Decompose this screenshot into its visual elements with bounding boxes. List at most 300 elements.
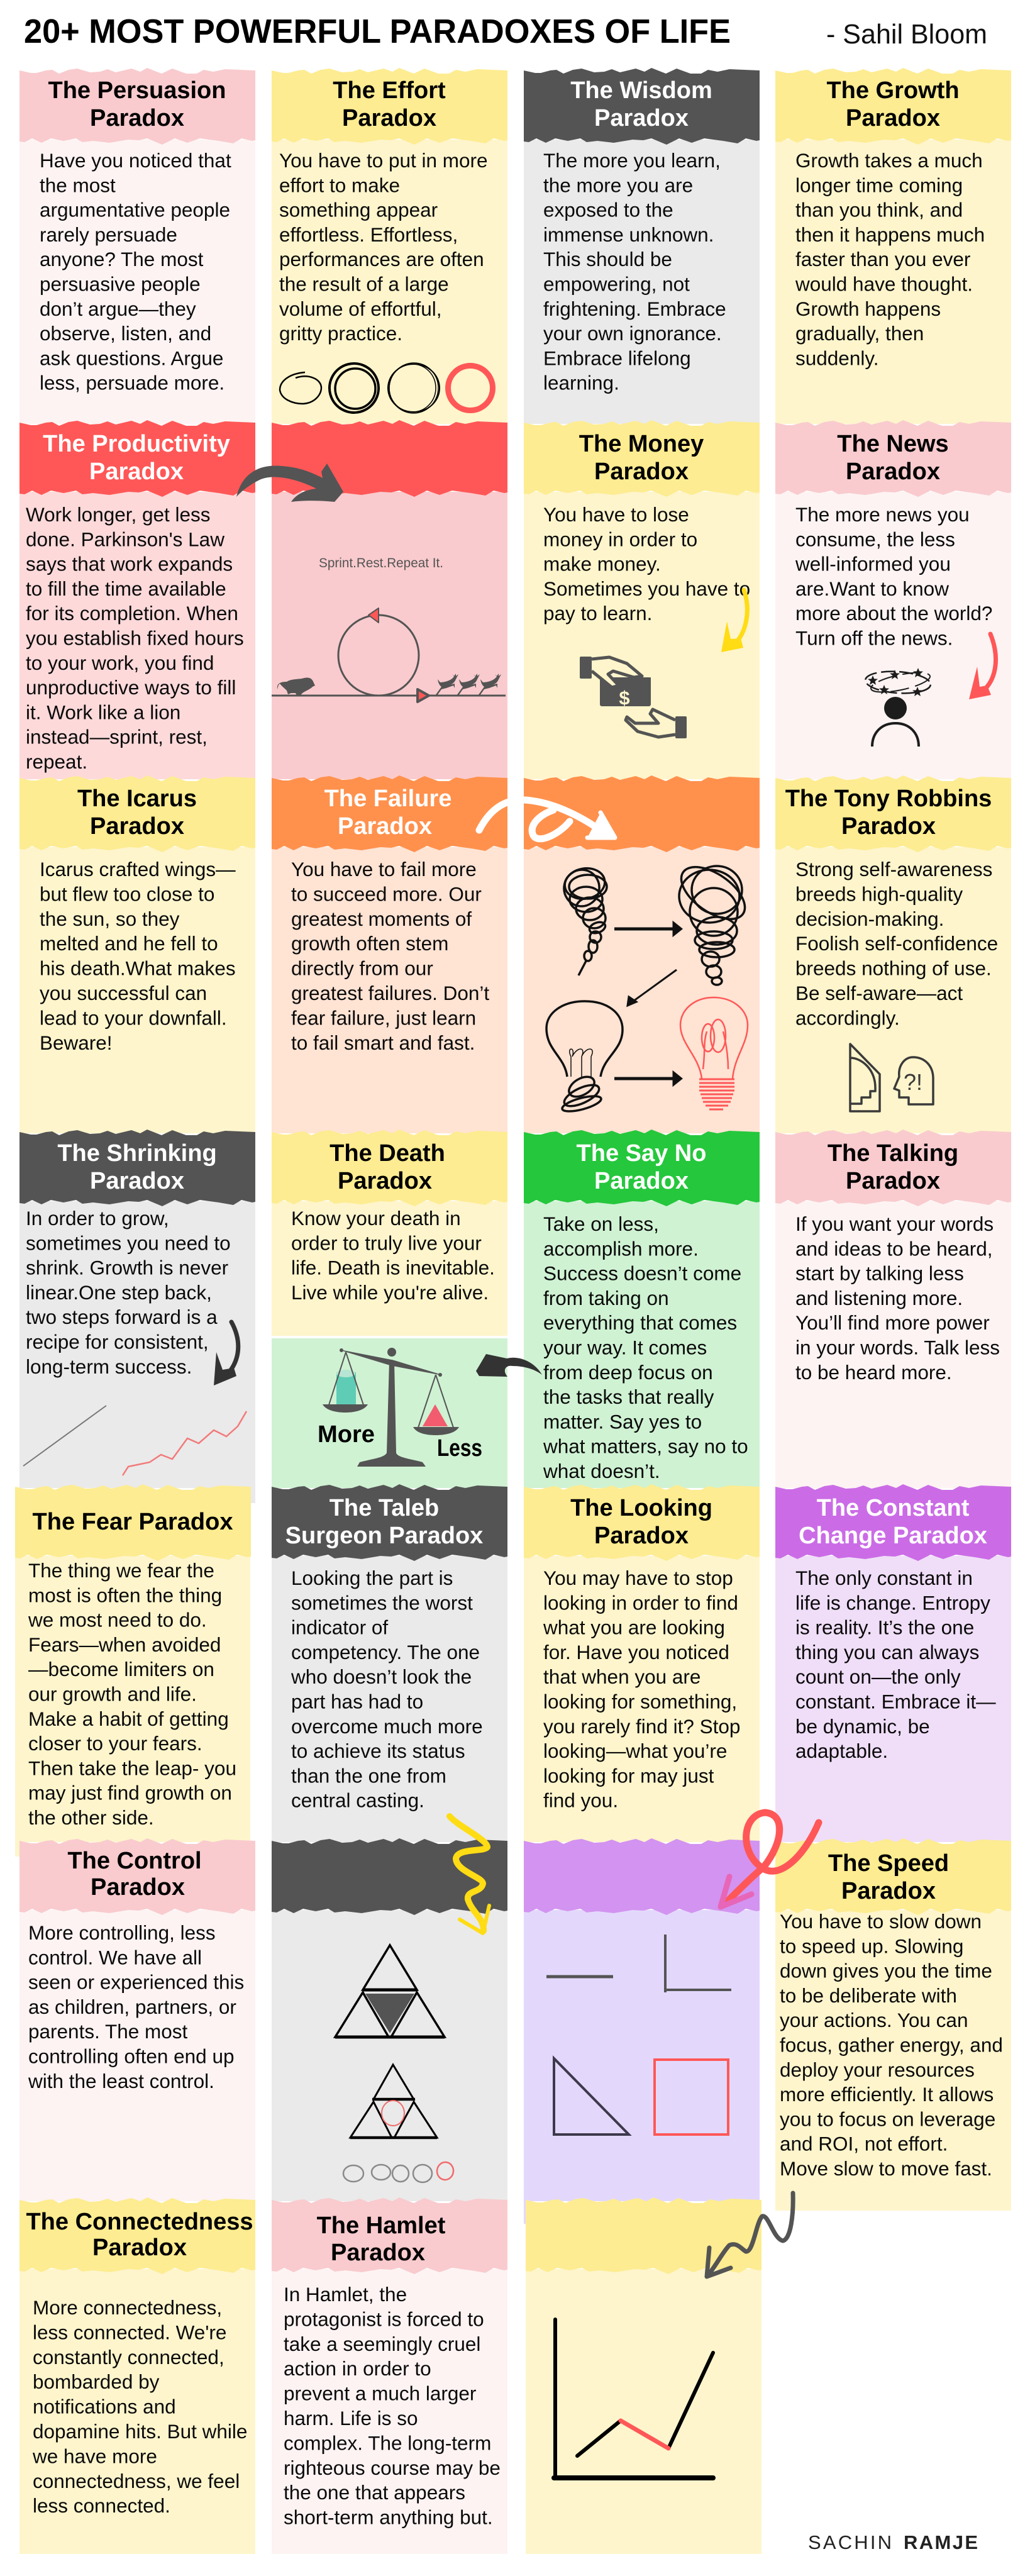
panel: icarus paradox: Paradox <box>90 813 184 840</box>
panel: speed paradox: The Speed <box>828 1850 949 1877</box>
panel: hamlet paradox: complex. The long-term <box>284 2431 491 2454</box>
panel: hamlet paradox: harm. Life is so <box>284 2407 418 2429</box>
panel: productivity paradox: to fill the time available <box>26 577 226 600</box>
arrow: dark squiggle to chart <box>707 2193 793 2277</box>
panel: shrinking paradox: shrink. Growth is never <box>26 1257 228 1279</box>
panel: connectedness paradox: The Connectedness <box>26 2209 253 2235</box>
panel: looking paradox: looking—what you’re <box>543 1740 727 1762</box>
label: less: Less <box>437 1435 482 1462</box>
panel: fear paradox: —become limiters on <box>28 1658 214 1680</box>
panel: productivity paradox: for its completion. When <box>26 602 238 625</box>
panel: growth paradox <box>775 68 1011 426</box>
arrow: first scribble to second <box>614 924 680 934</box>
panel: taleb surgeon paradox <box>272 1484 507 1845</box>
panel: say no paradox: from taking on <box>543 1287 669 1309</box>
panel: hamlet paradox: righteous course may be <box>284 2457 501 2479</box>
panel: taleb surgeon paradox: competency. The one <box>291 1641 480 1663</box>
icon: black bulb <box>546 1001 623 1114</box>
panel: effort paradox: effortless. Effortless, <box>279 223 458 246</box>
icon: two heads <box>850 1044 933 1111</box>
panel: failure paradox: The Failure <box>324 786 451 812</box>
panel: failure paradox: to fail smart and fast. <box>291 1031 475 1054</box>
panel: looking paradox: find you. <box>543 1789 618 1812</box>
panel: money paradox: The Money <box>579 431 704 457</box>
panel: connectedness paradox: notifications and <box>33 2396 176 2418</box>
arrow: yellow squiggle to triangles <box>450 1816 489 1933</box>
panel: taleb surgeon paradox: central casting. <box>291 1789 424 1812</box>
panel: persuasion paradox: observe, listen, and <box>40 322 211 345</box>
panel: speed paradox: to be deliberate with <box>780 1984 957 2007</box>
panel: say no paradox: Take on less, <box>543 1213 659 1235</box>
panel: effort paradox: Paradox <box>342 105 436 131</box>
icon: four circles from rough to perfect <box>280 358 493 418</box>
icon: triangle <box>554 2058 629 2135</box>
panel: hamlet paradox: take a seemingly cruel <box>284 2333 480 2355</box>
panel: constant change paradox: The Constant <box>817 1495 969 1521</box>
panel: wisdom paradox: immense unknown. <box>543 223 714 246</box>
panel: connectedness paradox: dopamine hits. But while <box>33 2420 247 2443</box>
arrow: failure to scribbles <box>479 800 615 839</box>
panel: productivity paradox: The Productivity <box>43 431 230 457</box>
panel: icarus paradox: but flew too close to <box>40 882 214 905</box>
icon label: question and exclamation: ?! <box>904 1069 922 1095</box>
arrow: productivity to sprint illustration <box>236 464 343 502</box>
panel: connectedness paradox: we have more <box>32 2445 157 2467</box>
panel: looking paradox: You may have to stop <box>543 1567 733 1589</box>
panel: money paradox: make money. <box>543 553 661 575</box>
panel: news paradox: more about the world? <box>795 602 992 625</box>
panel: wisdom paradox: Embrace lifelong <box>543 347 691 369</box>
panel: say no paradox: matter. Say yes to <box>543 1410 702 1433</box>
panel: fear paradox: Make a habit of getting <box>28 1707 229 1730</box>
panel: money paradox: pay to learn. <box>543 602 652 625</box>
panel: talking paradox: Paradox <box>846 1168 940 1194</box>
panel: growth paradox: Growth happens <box>795 297 941 320</box>
panel: speed paradox: focus, gather energy, and <box>780 2034 1003 2057</box>
panel: say no paradox: from deep focus on <box>543 1361 713 1384</box>
panel: connectedness paradox: bombarded by <box>33 2370 160 2393</box>
author credit: - Sahil Bloom <box>826 19 987 50</box>
panel: tony robbins paradox: accordingly. <box>795 1006 900 1029</box>
panel: say no paradox: your way. It comes <box>543 1336 707 1358</box>
panel: news paradox: Paradox <box>846 458 940 485</box>
panel: speed paradox: more efficiently. It allows <box>780 2083 994 2106</box>
panel: taleb surgeon paradox: than the one from <box>291 1764 446 1787</box>
panel: wisdom paradox: The Wisdom <box>570 77 712 104</box>
panel: icarus paradox: the sun, so they <box>40 908 180 930</box>
panel: tony robbins paradox <box>775 775 1011 1136</box>
panel: persuasion paradox: Paradox <box>90 105 184 131</box>
panel: fear paradox: Then take the leap- you <box>28 1757 236 1779</box>
panel: news paradox: are.Want to know <box>795 577 949 600</box>
panel: rebound chart <box>526 2197 761 2554</box>
panel: shrinking paradox: recipe for consistent, <box>26 1331 209 1353</box>
panel: fear paradox: The Fear Paradox <box>33 1509 233 1535</box>
panel: productivity paradox: Paradox <box>89 458 184 485</box>
panel: icarus paradox: lead to your downfall. <box>40 1006 227 1029</box>
panel: productivity paradox: Work longer, get less <box>26 503 211 526</box>
chart: straight line versus jagged growth <box>23 1406 246 1475</box>
panel: say no paradox: accomplish more. <box>543 1237 699 1260</box>
panel: fear paradox: closer to your fears. <box>28 1732 202 1755</box>
panel: speed paradox: Move slow to move fast. <box>780 2157 992 2180</box>
panel: looking paradox: that when you are <box>543 1665 701 1688</box>
icon: loop track <box>272 608 506 702</box>
panel: control paradox: Paradox <box>91 1874 185 1901</box>
arrow: black bulb to red bulb <box>614 1074 680 1084</box>
panel: death paradox: order to truly live your <box>291 1231 482 1254</box>
panel: failure paradox <box>272 775 507 1136</box>
panel: death paradox: Paradox <box>338 1168 432 1194</box>
title: 20+ MOST POWERFUL PARADOXES OF LIFE <box>24 13 731 50</box>
icon: triangle with dark centre <box>335 1945 445 2037</box>
panel: more less scale <box>272 1338 507 1496</box>
panel: control paradox: More controlling, less <box>28 1921 216 1944</box>
panel: persuasion paradox: less, persuade more. <box>40 372 224 394</box>
panel: speed paradox: Paradox <box>841 1878 936 1904</box>
panel: persuasion paradox: ask questions. Argue <box>40 347 223 369</box>
panel: control paradox: as children, partners, or <box>28 1996 236 2018</box>
panel: failure paradox: greatest moments of <box>291 908 472 930</box>
panel: news paradox: Turn off the news. <box>795 626 953 649</box>
panel: tony robbins paradox: The Tony Robbins <box>785 786 992 812</box>
panel: control paradox: parents. The most <box>28 2020 188 2043</box>
panel: persuasion paradox: The Persuasion <box>48 77 226 104</box>
panel: growth paradox: than you think, and <box>795 199 963 221</box>
panel: say no paradox: Success doesn’t come <box>543 1262 741 1285</box>
panel: wisdom paradox: your own ignorance. <box>543 322 722 345</box>
panel: talking paradox: and ideas to be heard, <box>795 1237 992 1260</box>
panel: growth paradox: faster than you ever <box>795 248 970 270</box>
panel: taleb surgeon paradox: part has had to <box>291 1690 423 1713</box>
panel: taleb surgeon paradox: Surgeon Paradox <box>285 1523 483 1549</box>
panel: looking paradox: you rarely find it? Stop <box>543 1715 740 1738</box>
panel: news paradox: The News <box>837 431 949 457</box>
icon: red bulb <box>680 997 748 1109</box>
panel: constant change paradox: is reality. It’s the one <box>795 1616 974 1639</box>
panel: looking paradox: looking for may just <box>543 1764 714 1787</box>
panel: control paradox: The Control <box>67 1848 202 1874</box>
panel: failure paradox: You have to fail more <box>291 858 477 880</box>
panel: constant change paradox: be dynamic, be <box>795 1715 930 1738</box>
panel: death paradox <box>272 1130 507 1336</box>
panel: effort paradox <box>272 68 507 426</box>
icon: dizzy person with stars <box>865 668 931 747</box>
panel: talking paradox: You’ll find more power <box>795 1311 990 1334</box>
footer credit: SACHIN <box>808 2531 892 2553</box>
panel: talking paradox: If you want your words <box>795 1213 994 1235</box>
panel: constant change paradox: Change Paradox <box>799 1523 987 1549</box>
panel: hamlet paradox: The Hamlet <box>317 2212 445 2239</box>
panel: wisdom paradox: exposed to the <box>543 199 673 221</box>
panel: death paradox: Live while you're alive. <box>291 1281 489 1304</box>
panel: money paradox: Paradox <box>594 458 689 485</box>
footer credit: RAMJE <box>904 2531 978 2553</box>
panel: icarus paradox: Icarus crafted wings— <box>40 858 236 880</box>
panel: looking paradox: looking in order to find <box>543 1591 738 1614</box>
panel: fear paradox: The thing we fear the <box>28 1559 214 1582</box>
panel: talking paradox <box>775 1130 1011 1496</box>
panel: wisdom paradox: This should be <box>543 248 672 270</box>
panel: wisdom paradox: Paradox <box>594 105 689 131</box>
panel: shapes illustration <box>524 1838 760 2224</box>
panel: productivity paradox: instead—sprint, rest, <box>26 726 208 748</box>
panel: hamlet paradox: prevent a much larger <box>284 2382 476 2405</box>
panel: fear paradox: most is often the thing <box>28 1584 222 1606</box>
panel: say no paradox: Paradox <box>594 1168 689 1194</box>
panel: growth paradox: Paradox <box>846 105 940 131</box>
panel: effort paradox: performances are often <box>279 248 484 270</box>
panel: growth paradox: The Growth <box>826 77 960 104</box>
panel: shrinking paradox: linear.One step back, <box>26 1281 212 1304</box>
panel: looking paradox: what you are looking <box>543 1616 725 1639</box>
panel: say no paradox: The Say No <box>577 1140 706 1167</box>
panel: taleb surgeon paradox: Looking the part is <box>291 1567 453 1589</box>
panel: productivity paradox: you establish fixed hours <box>26 626 244 649</box>
panel: speed paradox: You have to slow down <box>780 1910 982 1933</box>
panel: looking paradox: looking for something, <box>543 1690 737 1713</box>
panel: looking paradox: The Looking <box>570 1495 712 1521</box>
panel: say no paradox: what matters, say no to <box>543 1435 748 1458</box>
panel: shrinking paradox: long-term success. <box>26 1355 192 1378</box>
panel: fear paradox <box>15 1484 251 1857</box>
panel: growth paradox: would have thought. <box>795 273 973 296</box>
panel: failure paradox: growth often stem <box>291 932 448 955</box>
panel: icarus paradox: The Icarus <box>77 786 197 812</box>
panel: icarus paradox: melted and he fell to <box>40 932 218 955</box>
panel: taleb surgeon paradox: overcome much more <box>291 1715 483 1738</box>
panel: news paradox <box>775 420 1011 782</box>
panel: speed paradox: down gives you the time <box>780 1960 992 1982</box>
panel: speed paradox: deploy your resources <box>780 2058 975 2081</box>
panel: talking paradox: The Talking <box>828 1140 958 1167</box>
panel: shrinking paradox: The Shrinking <box>57 1140 217 1167</box>
panel: fear paradox: Fears—when avoided <box>28 1633 221 1656</box>
panel: constant change paradox: life is change. Entropy <box>795 1591 990 1614</box>
icon: big scribble <box>672 857 754 985</box>
icon: corner <box>664 1935 731 1992</box>
panel: hamlet paradox: short-term anything but. <box>284 2506 493 2529</box>
panel: shrinking paradox: Paradox <box>90 1168 184 1194</box>
arrow: shrinking down to chart <box>214 1322 238 1385</box>
panel: constant change paradox: count on—the only <box>795 1665 961 1688</box>
panel: constant change paradox: The only constant in <box>795 1567 973 1589</box>
panel: money paradox <box>524 420 760 782</box>
panel: money paradox: Sometimes you have to <box>543 577 750 600</box>
panel: talking paradox: in your words. Talk less <box>795 1336 1000 1358</box>
icon: single dash <box>546 1975 613 1979</box>
panel: productivity paradox: unproductive ways to fill <box>26 676 236 699</box>
panel: hamlet paradox <box>272 2197 507 2554</box>
panel: connectedness paradox <box>19 2197 255 2554</box>
arrow: red to dizzy person <box>969 634 995 699</box>
panel: hamlet paradox: action in order to <box>284 2357 431 2380</box>
panel: fear paradox: the other side. <box>28 1806 154 1829</box>
panel: death paradox: The Death <box>329 1140 445 1167</box>
panel: fear paradox: our growth and life. <box>28 1683 197 1706</box>
panel: death paradox: Know your death in <box>291 1207 461 1230</box>
panel: looking paradox: Paradox <box>594 1523 689 1549</box>
panel: speed paradox: to speed up. Slowing <box>780 1935 963 1957</box>
arrow: red loop to shapes <box>721 1813 819 1907</box>
icon: three leaping deer <box>435 674 501 696</box>
panel: say no paradox: what doesn’t. <box>543 1460 660 1482</box>
panel: shrinking paradox: In order to grow, <box>26 1207 169 1230</box>
panel: persuasion paradox: the most <box>40 174 116 196</box>
panel: hamlet paradox: Paradox <box>331 2240 425 2266</box>
panel: taleb surgeon paradox: who doesn’t look the <box>291 1665 472 1688</box>
panel: constant change paradox: thing you can always <box>795 1641 979 1663</box>
panel: productivity paradox <box>19 420 255 782</box>
panel: tony robbins paradox: Strong self-awareness <box>795 858 992 880</box>
panel: icarus paradox: his death.What makes <box>40 957 236 980</box>
arrow: yellow to money icon <box>721 590 747 652</box>
arrow: second scribble to bulb <box>628 970 677 1006</box>
panel: productivity paradox: says that work expands <box>26 553 233 575</box>
panel: fear paradox: may just find growth on <box>28 1782 232 1804</box>
panel: tony robbins paradox: Paradox <box>841 813 936 840</box>
panel: effort paradox: You have to put in more <box>279 149 488 172</box>
panel: constant change paradox: constant. Embrace it— <box>795 1690 996 1713</box>
panel: taleb surgeon paradox: indicator of <box>291 1616 388 1639</box>
panel: connectedness paradox: less connected. We're <box>33 2321 226 2343</box>
panel: effort paradox: the result of a large <box>279 273 449 296</box>
panel: looking paradox <box>524 1484 760 1845</box>
footer credit <box>808 2531 978 2553</box>
panel: constant change paradox: adaptable. <box>795 1740 888 1762</box>
panel: failure paradox: Paradox <box>338 813 432 840</box>
panel: money paradox: money in order to <box>543 528 697 550</box>
panel: icarus paradox: Beware! <box>40 1031 113 1054</box>
panel: productivity paradox: to your work, you find <box>26 652 214 674</box>
panel: speed paradox: your actions. You can <box>780 2009 968 2031</box>
icon: row of small circles <box>343 2161 455 2182</box>
panel: effort paradox: something appear <box>279 199 438 221</box>
panel: effort paradox: The Effort <box>333 77 446 104</box>
panel: persuasion paradox: don’t argue—they <box>40 297 196 320</box>
panel: sprint rest repeat illustration <box>272 420 507 782</box>
panel: wisdom paradox <box>524 68 760 426</box>
panel: control paradox: controlling often end up <box>28 2045 234 2068</box>
icon: running lion <box>277 677 315 696</box>
panel: news paradox: consume, the less <box>795 528 955 550</box>
panel: control paradox: seen or experienced this <box>28 1971 244 1994</box>
panel: growth paradox: then it happens much <box>795 223 985 246</box>
panel: persuasion paradox: persuasive people <box>40 273 201 296</box>
panel: tony robbins paradox: breeds high-quality <box>795 882 963 905</box>
panel: productivity paradox: repeat. <box>26 750 87 773</box>
panel: taleb surgeon paradox: to achieve its status <box>291 1740 465 1762</box>
panel: failure paradox: directly from our <box>291 957 433 980</box>
panel: persuasion paradox: rarely persuade <box>40 223 177 246</box>
label: more: More <box>318 1421 375 1448</box>
panel: persuasion paradox <box>19 68 255 426</box>
icon: hands exchanging money <box>580 657 687 738</box>
panel: taleb surgeon paradox: sometimes the worst <box>291 1591 473 1614</box>
panel: hamlet paradox: the one that appears <box>284 2481 465 2504</box>
panel: productivity paradox: done. Parkinson's Law <box>26 528 224 550</box>
caption: Sprint.Rest.Repeat It. <box>319 556 443 570</box>
panel: growth paradox: longer time coming <box>795 174 963 196</box>
panel: looking paradox: for. Have you noticed <box>543 1641 729 1663</box>
panel: speed paradox <box>775 1838 1011 2211</box>
panel: effort paradox: gritty practice. <box>279 322 402 345</box>
panel: wisdom paradox: frightening. Embrace <box>543 297 726 320</box>
panel: wisdom paradox: empowering, not <box>543 273 690 296</box>
panel: failure paradox: to succeed more. Our <box>291 882 482 905</box>
panel: tony robbins paradox: breeds nothing of use. <box>795 957 992 980</box>
panel: say no paradox: everything that comes <box>543 1311 737 1334</box>
panel: persuasion paradox: argumentative people <box>40 199 230 221</box>
panel: connectedness paradox: More connectedness, <box>33 2296 222 2319</box>
panel: persuasion paradox: anyone? The most <box>40 248 204 270</box>
panel: triangles illustration <box>272 1838 507 2204</box>
panel: tony robbins paradox: decision-making. <box>795 908 944 930</box>
panel: tony robbins paradox: Foolish self-confidence <box>795 932 998 955</box>
panel: failure paradox: greatest failures. Don’t <box>291 982 489 1004</box>
icon: triangle with red circle <box>350 2065 437 2138</box>
icon: small scribble <box>561 865 607 975</box>
icon: balance scale <box>323 1348 459 1467</box>
panel: news paradox: The more news you <box>795 503 970 526</box>
panel: scribble to bulb illustration <box>524 775 760 1136</box>
panel: wisdom paradox: learning. <box>543 372 619 394</box>
panel: icarus paradox <box>19 775 255 1136</box>
panel: news paradox: well-informed you <box>795 553 951 575</box>
chart: dip then rise line <box>554 2319 713 2478</box>
panel: productivity paradox: it. Work like a lion <box>26 701 180 723</box>
panel: say no paradox: the tasks that really <box>543 1385 714 1408</box>
panel: wisdom paradox: the more you are <box>543 174 693 196</box>
panel: money paradox: You have to lose <box>543 503 689 526</box>
panel: death paradox: life. Death is inevitable. <box>291 1257 495 1279</box>
panel: growth paradox: gradually, then <box>795 322 924 345</box>
panel: failure paradox: fear failure, just learn <box>291 1006 476 1029</box>
panel: control paradox: with the least control. <box>28 2070 214 2092</box>
panel: icarus paradox: you successful can <box>40 982 207 1004</box>
panel: effort paradox: volume of effortful, <box>279 297 442 320</box>
panel: control paradox <box>19 1838 255 2204</box>
panel: connectedness paradox: constantly connected, <box>33 2346 224 2368</box>
panel: fear paradox: we most need to do. <box>28 1609 207 1631</box>
panel: growth paradox: Growth takes a much <box>795 149 983 172</box>
panel: shrinking paradox <box>19 1130 255 1503</box>
panel: constant change paradox <box>775 1484 1011 1845</box>
icon: hands exchanging money: $ <box>619 687 630 709</box>
panel: hamlet paradox: In Hamlet, the <box>284 2283 407 2306</box>
panel: shrinking paradox: sometimes you need to <box>26 1231 231 1254</box>
panel: talking paradox: and listening more. <box>795 1287 963 1309</box>
panel: growth paradox: suddenly. <box>795 347 879 369</box>
panel: connectedness paradox: less connected. <box>33 2494 170 2517</box>
panel: speed paradox: and ROI, not effort. <box>780 2133 948 2155</box>
panel: speed paradox: you to focus on leverage <box>780 2107 995 2130</box>
panel: tony robbins paradox: Be self-aware—act <box>795 982 963 1004</box>
panel: control paradox: control. We have all <box>28 1946 202 1968</box>
panel: wisdom paradox: The more you learn, <box>543 149 721 172</box>
panel: taleb surgeon paradox: The Taleb <box>329 1495 439 1521</box>
panel: talking paradox: start by talking less <box>795 1262 964 1285</box>
arrow: say no to scale <box>476 1354 542 1377</box>
panel: say no paradox <box>524 1130 760 1496</box>
panel: persuasion paradox: Have you noticed that <box>40 149 231 172</box>
panel: hamlet paradox: protagonist is forced to <box>284 2307 484 2330</box>
icon: red rectangle <box>655 2060 728 2135</box>
panel: shrinking paradox: two steps forward is a <box>26 1306 218 1328</box>
panel: talking paradox: to be heard more. <box>795 1361 952 1384</box>
panel: effort paradox: effort to make <box>279 174 400 196</box>
panel: connectedness paradox: connectedness, we feel <box>33 2470 240 2492</box>
